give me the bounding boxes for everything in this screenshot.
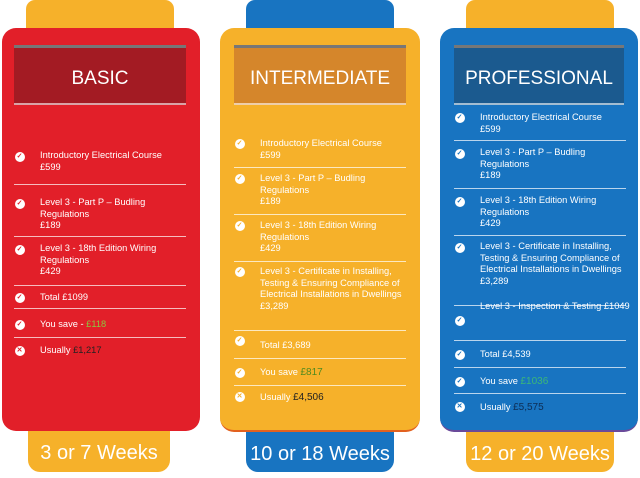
list: basic items: £429 <box>40 266 61 276</box>
list: professional items: Regulations <box>480 206 529 216</box>
list: basic items: Level 3 - Part P – Budling <box>40 197 145 207</box>
list: intermediate items: ✓ <box>237 268 242 274</box>
list: professional items: ✓ <box>457 150 462 156</box>
list: basic items: £189 <box>40 220 61 230</box>
list: professional items <box>454 112 630 413</box>
list: professional items: £429 <box>480 218 501 228</box>
list: professional items: Regulations <box>480 158 529 168</box>
list: intermediate items: £429 <box>260 243 281 253</box>
list: intermediate items: ✓ <box>237 368 242 376</box>
list: intermediate items: Total £3,689 <box>260 340 311 350</box>
list: intermediate items: Testing & Ensuring Compliance of <box>260 278 400 288</box>
list: professional items: Level 3 - 18th Edition Wiring <box>480 195 596 205</box>
list: intermediate items: Electrical Installations in Dwellings <box>260 289 402 299</box>
list: professional items: Total £4,539 <box>480 349 531 359</box>
list: professional items: You save £1036 <box>480 376 548 387</box>
card intermediate <box>220 28 420 432</box>
list: intermediate items: Level 3 - 18th Edition Wiring <box>260 220 376 230</box>
list: basic items: ✓ <box>17 200 22 206</box>
top tab professional <box>466 0 614 30</box>
list: professional items: ✓ <box>457 198 462 204</box>
list: intermediate items: Regulations <box>260 232 309 242</box>
panel: professional <box>440 0 638 472</box>
card basic <box>2 28 200 431</box>
heading: INTERMEDIATE: INTERMEDIATE <box>250 68 390 89</box>
list: intermediate items: ✓ <box>237 140 242 146</box>
list: basic items: Level 3 - 18th Edition Wiring <box>40 243 156 253</box>
list: professional items: Testing & Ensuring Compliance of <box>480 252 620 262</box>
list: basic items: ✕ <box>17 346 22 354</box>
bottom tab: 3 or 7 weeks: 3 or 7 Weeks <box>40 442 158 464</box>
list: professional items: ✓ <box>457 244 462 250</box>
bottom tab: 10 or 18 weeks: 10 or 18 Weeks <box>250 443 390 465</box>
list: professional items: Electrical Installations in Dwellings <box>480 264 622 274</box>
list: professional items: ✓ <box>457 378 462 384</box>
list: intermediate items: £189 <box>260 196 281 206</box>
list: basic items: ✓ <box>17 152 22 160</box>
list: intermediate items: £599 <box>260 150 281 160</box>
list: intermediate items <box>234 138 406 403</box>
list: professional items: Usually £5,575 <box>480 402 544 413</box>
heading: INTERMEDIATE <box>234 45 406 105</box>
heading: BASIC <box>14 45 186 105</box>
card professional <box>440 28 638 432</box>
list: intermediate items: You save £817 <box>260 367 323 378</box>
list: intermediate items: Usually £4,506 <box>260 392 324 403</box>
list: basic items: ✓ <box>17 246 22 252</box>
panel: intermediate <box>220 0 420 472</box>
heading: PROFESSIONAL <box>454 45 624 105</box>
list: intermediate items: Level 3 - Certificate in Installing, <box>260 266 392 276</box>
list: basic items: Usually £1,217 <box>40 345 102 355</box>
list: basic items: Total £1099 <box>40 292 88 302</box>
list: basic items: Regulations <box>40 208 89 218</box>
list: professional items: ✓ <box>457 316 462 324</box>
list: intermediate items: Introductory Electrical Course <box>260 138 382 148</box>
list: professional items: £3,289 <box>480 276 508 286</box>
list: basic items: Introductory Electrical Course <box>40 150 162 160</box>
list: intermediate items: ✓ <box>237 174 242 182</box>
top tab intermediate <box>246 0 394 30</box>
list: professional items: ✓ <box>457 114 462 120</box>
bottom tab: 10 or 18 weeks <box>246 430 394 472</box>
list: basic items <box>14 150 186 356</box>
bottom tab: 12 or 20 weeks <box>466 430 614 472</box>
list: professional items: ✓ <box>457 350 462 358</box>
list: intermediate items: ✓ <box>237 336 242 344</box>
list: professional items: Level 3 - Certificate in Installing, <box>480 241 612 251</box>
list: intermediate items: ✕ <box>237 392 242 400</box>
heading: BASIC: BASIC <box>71 68 129 89</box>
bottom tab: 3 or 7 weeks <box>28 428 170 472</box>
list: professional items: Level 3 - Inspection & Testing £1049 <box>480 301 630 311</box>
list: professional items: Level 3 - Part P – Budling <box>480 147 585 157</box>
list: professional items: Introductory Electrical Course <box>480 112 602 122</box>
list: intermediate items: £3,289 <box>260 300 288 310</box>
heading: PROFESSIONAL: PROFESSIONAL <box>465 68 613 89</box>
list: intermediate items: Level 3 - Part P – Budling <box>260 173 365 183</box>
list: basic items: You save - £118 <box>40 319 106 329</box>
list: professional items: £189 <box>480 170 501 180</box>
list: intermediate items: Regulations <box>260 184 309 194</box>
list: basic items: ✓ <box>17 320 22 328</box>
list: basic items: Regulations <box>40 254 89 264</box>
panel: basic <box>2 0 200 472</box>
top tab basic <box>26 0 174 30</box>
list: professional items: ✕ <box>457 402 462 410</box>
list: basic items: £599 <box>40 162 61 172</box>
bottom tab: 12 or 20 weeks: 12 or 20 Weeks <box>470 443 610 465</box>
list: basic items: ✓ <box>17 294 22 300</box>
list: intermediate items: ✓ <box>237 222 242 228</box>
list: professional items: £599 <box>480 124 501 134</box>
